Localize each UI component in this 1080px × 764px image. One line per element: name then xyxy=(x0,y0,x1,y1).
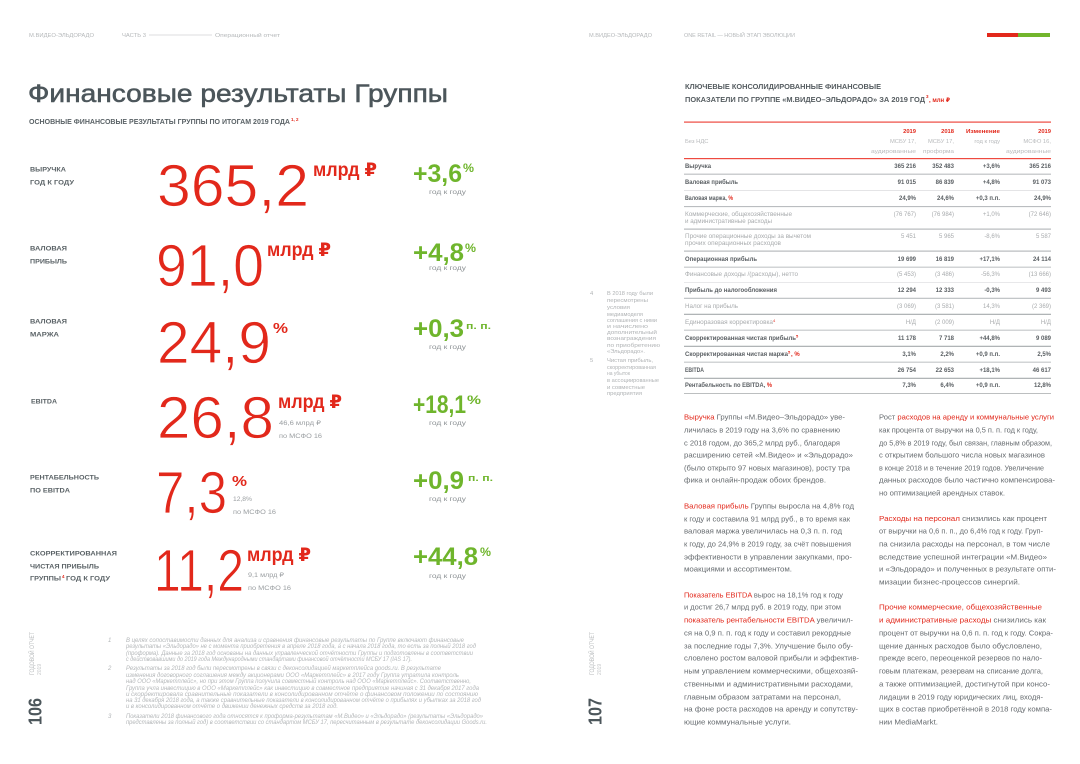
paragraph: SG&A: и административные расходы снизились как xyxy=(879,616,1047,624)
table header xyxy=(684,122,1052,159)
row: EBITDA margin xyxy=(685,382,1052,389)
side footnotes: 4 xyxy=(590,291,594,297)
row: income tax: (2 369) xyxy=(1032,304,1051,310)
row: operating profit: 16 819 xyxy=(936,257,955,263)
metric: gross profit: ПРИБЫЛЬ xyxy=(30,258,67,266)
side footnotes: медиамоделя xyxy=(607,312,643,318)
side footnotes: скорректированная xyxy=(607,365,656,371)
paragraph: personnel costs: и «Эльдорадо» и полученных в результате опти- xyxy=(879,564,1057,574)
left footnotes xyxy=(107,638,487,726)
left footnotes: результаты «Эльдорадо» не с момента приобретения в апреле 2018 года, а с начала 2018 года, то есть за полный 2018 год xyxy=(125,643,477,650)
left side page label: 2019 xyxy=(37,664,43,675)
left footnotes: (проформа). Данные за 2018 год основаны на данных управленческой отчётности Группы и подготовлены в соответствии xyxy=(126,650,474,657)
paragraph: gross profit: к году, до 24,9% в 2019 году, за счёт повышения xyxy=(684,540,851,548)
row: one-off adjustment: Н/Д xyxy=(906,320,916,326)
subtitle: ОСНОВНЫЕ ФИНАНСОВЫЕ РЕЗУЛЬТАТЫ ГРУППЫ ПО ИТОГАМ 2019 ГОДА xyxy=(29,119,290,126)
row: financial income: (13 666) xyxy=(1029,272,1051,278)
page number 106: 106 xyxy=(26,698,46,725)
table title: КЛЮЧЕВЫЕ КОНСОЛИДИРОВАННЫЕ ФИНАНСОВЫЕ xyxy=(685,82,881,91)
row: adjusted net margin: Скорректированная чистая маржа xyxy=(685,352,789,358)
metric: adjusted net profit: ГОД К ГОДУ xyxy=(66,576,111,582)
row: adjusted net profit: 9 089 xyxy=(1036,336,1052,342)
paragraph: personnel costs: от выручки на 0,6 п. п., до 6,4% год к году. Груп- xyxy=(879,526,1044,536)
metric: EBITDA margin: п. п. xyxy=(468,473,493,484)
row: gross profit: 86 839 xyxy=(936,180,955,186)
left footnotes: 1 xyxy=(108,638,111,644)
metric: EBITDA margin: 12,8% xyxy=(233,496,252,503)
side footnotes: дополнительный xyxy=(607,329,657,336)
row: adjusted net profit: Скорректированная чистая прибыль xyxy=(685,335,796,342)
paragraph: gross profit: Валовая прибыль Группы выросла на 4,8% год xyxy=(684,502,855,510)
row: other operating income: Прочие операционные доходы за вычетом xyxy=(685,234,811,240)
metric: EBITDA: год к году xyxy=(429,420,467,427)
metric: EBITDA margin: год к году xyxy=(429,496,467,503)
row: one-off adjustment: 4 xyxy=(773,318,776,323)
paragraph: EBITDA: на фоне роста расходов на аренду и сопутству- xyxy=(684,704,859,714)
paragraph: rent and utilities: в конце 2018 и в течение 2019 годов. Увеличение xyxy=(879,464,1044,472)
paragraph: SG&A: нии MediaMarkt. xyxy=(879,718,938,726)
paragraph: rent and utilities xyxy=(879,412,1056,498)
metric: adjusted net profit: СКОРРЕКТИРОВАННАЯ xyxy=(30,550,117,558)
metric: EBITDA margin: 7,3 xyxy=(156,460,227,526)
row: EBITDA: +18,1% xyxy=(979,368,1001,374)
right side page label xyxy=(588,632,603,675)
row: SG&A: Коммерческие, общехозяйственные xyxy=(685,211,793,218)
metric: EBITDA margin xyxy=(30,460,493,526)
row: SG&A: и административные расходы xyxy=(685,219,772,225)
right side page label: 2019 xyxy=(597,664,603,675)
metric: EBITDA: млрд ₽ xyxy=(278,392,342,413)
row: SG&A: +1,0% xyxy=(983,212,1001,218)
right page header: М.ВИДЕО-ЭЛЬДОРАДО xyxy=(589,33,653,39)
metric: revenue: ВЫРУЧКА xyxy=(30,166,66,174)
paragraph: personnel costs: па снизила расходы на персонал, в том числе xyxy=(879,540,1050,548)
left commentary column xyxy=(684,412,860,726)
metric: gross margin: +0,3 xyxy=(413,315,464,343)
right side page label: ГОДОВОЙ ОТЧЕТ xyxy=(588,632,596,675)
row: adjusted net profit: 7 718 xyxy=(939,336,955,342)
side footnotes xyxy=(590,291,661,397)
metric: EBITDA margin: ПО EBITDA xyxy=(30,488,70,494)
row: other operating income: прочих операционных расходов xyxy=(685,241,781,247)
side footnotes: вознаграждения xyxy=(607,336,656,342)
row: gross margin: 24,6% xyxy=(937,196,955,202)
paragraph: EBITDA: и достиг 26,7 млрд руб. в 2019 году, при этом xyxy=(684,602,841,612)
metric: adjusted net profit xyxy=(30,538,491,604)
table title xyxy=(685,82,951,104)
row: other operating income: 5 965 xyxy=(939,234,955,240)
paragraph: rent and utilities: с открытием большого числа новых магазинов xyxy=(879,450,1045,460)
metric: gross margin: год к году xyxy=(429,344,467,351)
metric: adjusted net profit: +44,8 xyxy=(413,543,478,571)
row: income tax: 14,3% xyxy=(983,304,1001,310)
metric: adjusted net profit: год к году xyxy=(429,573,467,580)
paragraph: personnel costs xyxy=(879,514,1057,586)
side footnotes: на убыток xyxy=(607,371,630,377)
paragraph: rent and utilities: данных расходов было частично компенсирова- xyxy=(879,476,1056,484)
right page header xyxy=(589,31,795,39)
row: adjusted net margin: , % xyxy=(791,352,800,358)
row: income tax: Налог на прибыль xyxy=(685,304,738,310)
table header: МСФО 16, xyxy=(1023,139,1051,145)
metric: revenue xyxy=(30,153,474,219)
paragraph: EBITDA: главным образом затратами на персонал, xyxy=(684,692,841,702)
paragraph: SG&A: а также оптимизацией, достигнутой при консо- xyxy=(879,680,1051,688)
table header: Без НДС xyxy=(685,139,708,145)
paragraph: gross profit: эффективности в управлении закупками, про- xyxy=(684,552,853,562)
row: profit before tax: Прибыль до налогообложения xyxy=(685,287,777,294)
left footnotes: Показатели 2018 финансового года относятся к проформа-результатам «М.Видео» и «Эльдорадо» (результаты «Эльдорадо» xyxy=(126,714,484,720)
paragraph: EBITDA: ся на 0,9 п. п. год к году и составил рекордные xyxy=(684,628,851,638)
paragraph: gross profit: к году и составила 91 млрд руб., в то время как xyxy=(684,514,851,524)
metric: adjusted net profit: по МСФО 16 xyxy=(248,585,291,592)
row: adjusted net margin: 2,5% xyxy=(1037,352,1052,358)
row: one-off adjustment: Н/Д xyxy=(1041,320,1051,326)
metric: EBITDA margin: РЕНТАБЕЛЬНОСТЬ xyxy=(30,474,99,482)
left footnotes: и в консолидированном отчёте о движении денежных средств за 2018 год. xyxy=(126,704,338,710)
paragraph: gross profit: валовая маржа увеличилась на 0,3 п. п. год xyxy=(684,526,843,536)
side footnotes: 5 xyxy=(590,358,593,364)
row: revenue: 352 483 xyxy=(932,164,955,170)
row: income tax: (3 069) xyxy=(897,304,916,310)
table header: 2019 xyxy=(903,129,917,135)
row: income tax xyxy=(685,304,1051,310)
row: SG&A xyxy=(685,211,1051,225)
right commentary column xyxy=(879,412,1057,726)
paragraph: EBITDA xyxy=(684,590,860,726)
metric: gross profit: млрд ₽ xyxy=(267,240,331,261)
row: operating profit: 19 699 xyxy=(898,257,917,263)
paragraph: EBITDA: показатель рентабельности EBITDA увеличил- xyxy=(684,616,854,624)
left footnotes: В целях сопоставимости данных для анализа и сравнения финансовые результаты по Группе включают финансовые xyxy=(126,638,465,644)
row: gross profit: +4,8% xyxy=(983,180,1001,186)
side footnotes: условия xyxy=(607,305,630,311)
paragraph: SG&A: щих в состав приобретённой в 2018 году компа- xyxy=(879,704,1053,714)
row: financial income xyxy=(685,272,1051,278)
metric: adjusted net profit: 4 xyxy=(62,574,65,579)
paragraph: revenue: Выручка Группы «М.Видео–Эльдорадо» уве- xyxy=(684,412,846,422)
paragraph: EBITDA: словлено ростом валовой прибыли и эффектив- xyxy=(684,654,860,662)
metric: revenue: 365,2 xyxy=(157,153,309,219)
side footnotes: и совместные xyxy=(607,385,645,391)
row: revenue xyxy=(685,164,1052,170)
row: profit before tax: -0,3% xyxy=(984,288,1001,294)
metric: EBITDA: % xyxy=(467,393,481,407)
metric: gross profit: 91,0 xyxy=(156,233,264,299)
metric: gross profit: год к году xyxy=(429,265,467,272)
paragraph: revenue: с 2018 годом, до 365,2 млрд руб., благодаря xyxy=(684,438,840,448)
row: SG&A: (76 767) xyxy=(894,212,916,218)
paragraph: SG&A: процент от выручки на 0,6 п. п. год к году. Сокра- xyxy=(879,628,1054,638)
row: profit before tax xyxy=(685,287,1052,294)
row: EBITDA: 46 617 xyxy=(1033,368,1052,374)
paragraph: SG&A: Прочие коммерческие, общехозяйственные xyxy=(879,602,1042,612)
row: gross margin: Валовая маржа, % xyxy=(685,196,734,202)
row: gross profit: 91 015 xyxy=(898,180,917,186)
paragraph: EBITDA: за последние годы 7,3%. Улучшение было обу- xyxy=(684,642,854,650)
financial table xyxy=(684,122,1052,394)
row: financial income: Финансовые доходы /(расходы), нетто xyxy=(685,272,799,278)
row: operating profit: 24 114 xyxy=(1033,257,1052,263)
page number 107: 107 xyxy=(586,698,606,725)
metric: gross profit: +4,8 xyxy=(413,239,464,267)
row: gross profit: 91 073 xyxy=(1033,180,1052,186)
row: gross profit xyxy=(685,179,1052,186)
row: EBITDA margin: +0,9 п.п. xyxy=(976,383,1000,389)
row: EBITDA: 26 754 xyxy=(898,368,917,374)
paragraph: rent and utilities: но оптимизацией арендных ставок. xyxy=(879,488,1005,498)
row: financial income: (3 486) xyxy=(935,272,954,278)
table header: год к году xyxy=(974,139,1000,145)
table header: МСБУ 17, xyxy=(890,139,916,145)
table header: 2019 xyxy=(1038,129,1052,135)
paragraph: EBITDA: Показатель EBITDA вырос на 18,1% год к году xyxy=(684,590,843,600)
row: adjusted net profit xyxy=(685,334,1052,342)
left footnotes: изменения договорного соглашения между акционерами ООО «Маркетплейс» в 2017 году Группа утратила контроль xyxy=(126,672,459,679)
row: adjusted net margin: +0,9 п.п. xyxy=(976,352,1000,358)
metric: gross profit: % xyxy=(465,241,476,255)
paragraph: SG&A: лидации в 2019 году юридических лиц, входя- xyxy=(879,692,1044,702)
left footnotes: с действовавшими до 2019 года Международными стандартами финансовой отчётности МСБУ 17 (IAS 17). xyxy=(126,656,412,663)
metric: EBITDA: по МСФО 16 xyxy=(279,433,322,440)
metric: gross margin: % xyxy=(273,320,288,337)
title: Финансовые результаты Группы xyxy=(28,80,448,108)
row: revenue: +3,6% xyxy=(983,164,1001,170)
row: one-off adjustment: (2 009) xyxy=(935,320,954,326)
row: adjusted net profit: 5 xyxy=(796,334,799,338)
metric: gross margin: ВАЛОВАЯ xyxy=(30,318,67,326)
row: adjusted net margin: 5 xyxy=(788,350,791,354)
left page header xyxy=(29,32,281,39)
side footnotes: соглашения с ними xyxy=(607,318,657,324)
metric: gross profit: ВАЛОВАЯ xyxy=(30,246,67,252)
metric: EBITDA margin: % xyxy=(232,473,247,490)
metric: gross margin: 24,9 xyxy=(157,310,271,376)
row: SG&A: (76 984) xyxy=(932,212,954,218)
row: SG&A: (72 646) xyxy=(1029,212,1051,218)
table header: аудированные xyxy=(1006,149,1051,155)
row: profit before tax: 9 493 xyxy=(1036,288,1052,294)
metric: revenue: +3,6 xyxy=(413,160,462,188)
paragraph: EBITDA: ющие коммунальные услуги. xyxy=(684,718,791,726)
table header: проформа xyxy=(923,149,955,155)
metric: EBITDA: +18,1 xyxy=(413,391,466,419)
paragraph: SG&A: щение данных расходов было обусловлено, xyxy=(879,642,1042,650)
left page header: Операционный отчет xyxy=(215,32,281,39)
row: EBITDA: EBITDA xyxy=(685,368,705,374)
metric: revenue: млрд ₽ xyxy=(313,160,377,181)
paragraph: personnel costs: мизации бизнес-процессов синергий. xyxy=(879,578,1020,586)
metric: adjusted net profit: млрд ₽ xyxy=(247,545,311,566)
metric: gross margin xyxy=(30,310,491,376)
left footnotes: Результаты за 2018 год были пересмотрены в связи с деконсолидацией маркетплейса goods.ru. В результате xyxy=(126,665,442,672)
paragraph: EBITDA: ственными и административными расходами, xyxy=(684,680,853,688)
row: one-off adjustment xyxy=(685,318,1051,326)
metric: adjusted net profit: ЧИСТАЯ ПРИБЫЛЬ xyxy=(30,564,99,570)
table rules xyxy=(684,174,1051,394)
row: income tax: (3 581) xyxy=(935,304,954,310)
paragraph: revenue: расширению сетей «М.Видео» и «Эльдорадо» xyxy=(684,450,853,460)
metric: gross profit xyxy=(30,233,476,299)
metric: adjusted net profit: 9,1 млрд ₽ xyxy=(248,572,284,579)
left footnotes: представлены за полный год) в соответствии со стандартом МСБУ 17, пересчитанным в результате деконсолидации Goods.ru. xyxy=(126,719,487,726)
row: adjusted net margin: 3,1% xyxy=(902,352,917,358)
row: adjusted net margin xyxy=(685,350,1052,358)
metric: gross margin: МАРЖА xyxy=(30,332,59,338)
row: other operating income xyxy=(685,234,1052,247)
row: revenue: 365 216 xyxy=(894,164,917,170)
row: financial income: -56,3% xyxy=(981,272,1001,278)
row: gross margin: +0,3 п.п. xyxy=(976,196,1000,202)
paragraph: SG&A: прежде всего, переоценкой резервов по нало- xyxy=(879,654,1043,662)
row: operating profit xyxy=(685,256,1052,263)
row: other operating income: 5 587 xyxy=(1036,234,1052,240)
row: EBITDA: 22 653 xyxy=(936,368,955,374)
row: financial income: (5 453) xyxy=(897,272,916,278)
row: EBITDA xyxy=(685,368,1052,374)
row: EBITDA margin: 7,3% xyxy=(902,383,917,389)
row: EBITDA margin: 12,8% xyxy=(1034,383,1052,389)
side footnotes: пересмотрены xyxy=(607,298,648,304)
metric: revenue: год к году xyxy=(429,189,467,196)
table header: аудированные xyxy=(871,149,916,155)
paragraph: gross profit: моакциями и ассортиментом. xyxy=(684,564,792,574)
row: operating profit: +17,1% xyxy=(979,257,1001,263)
row: gross margin xyxy=(685,196,1052,202)
paragraph: rent and utilities: до 5,8% в 2019 году, был связан, главным образом, xyxy=(879,438,1052,448)
row: gross margin: 24,9% xyxy=(899,196,917,202)
table header: МСБУ 17, xyxy=(928,139,954,145)
row: one-off adjustment: Единоразовая корректировка xyxy=(685,320,774,326)
row: adjusted net profit: 11 178 xyxy=(898,336,917,342)
row: operating profit: Операционная прибыль xyxy=(685,256,757,263)
paragraph: personnel costs: Расходы на персонал снизились как процент xyxy=(879,514,1048,523)
row: gross margin: 24,9% xyxy=(1034,196,1052,202)
metric: adjusted net profit: ГРУППЫ xyxy=(30,576,62,582)
row: adjusted net margin: 2,2% xyxy=(940,352,955,358)
left page header: М.ВИДЕО-ЭЛЬДОРАДО xyxy=(29,33,95,39)
row: one-off adjustment: Н/Д xyxy=(990,320,1000,326)
table header: 2018 xyxy=(941,129,955,135)
paragraph: revenue: личилась в 2019 году на 3,6% по сравнению xyxy=(684,426,840,434)
metric: EBITDA: EBITDA xyxy=(31,398,57,406)
paragraph: SG&A: говым платежам, резервам на списание долга, xyxy=(879,666,1043,676)
table title: , млн ₽ xyxy=(929,97,951,104)
row: profit before tax: 12 333 xyxy=(936,288,955,294)
metric: EBITDA margin: +0,9 xyxy=(413,467,464,495)
row: EBITDA margin: Рентабельность по EBITDA, % xyxy=(685,382,773,389)
paragraph: rent and utilities: Рост расходов на аренду и коммунальные услуги xyxy=(879,412,1054,422)
side footnotes: «Эльдорадо». xyxy=(607,349,645,355)
left footnotes: 2 xyxy=(107,666,112,672)
metric: EBITDA: 46,6 млрд ₽ xyxy=(279,420,321,427)
side footnotes: предприятия xyxy=(607,391,642,397)
metric: adjusted net profit: 11,2 xyxy=(154,538,244,604)
side footnotes: и начислено xyxy=(607,324,648,330)
left footnotes: Группа учла инвестицию в ООО «Маркетплейс» как инвестицию в совместное предприятие начиная с 31 декабря 2017 года xyxy=(126,685,480,692)
paragraph: rent and utilities: как процента от выручки на 0,5 п. п. год к году, xyxy=(879,426,1038,434)
paragraph: SG&A xyxy=(879,602,1054,726)
row: profit before tax: 12 294 xyxy=(898,288,917,294)
paragraph: revenue: (было открыто 97 новых магазинов), росту тра xyxy=(684,464,851,472)
metric: revenue: % xyxy=(463,161,474,175)
row: adjusted net profit: +44,8% xyxy=(979,336,1001,342)
row: EBITDA margin: 6,4% xyxy=(940,383,955,389)
right page header: ONE RETAIL — НОВЫЙ ЭТАП ЭВОЛЮЦИИ xyxy=(684,31,795,39)
table title: 3 xyxy=(926,94,929,99)
side footnotes: Чистая прибыль, xyxy=(607,358,653,364)
metric: EBITDA xyxy=(31,385,481,451)
row: other operating income: 5 451 xyxy=(901,234,917,240)
metric: EBITDA: 26,8 xyxy=(157,385,274,451)
paragraph: revenue xyxy=(684,412,853,484)
metric: adjusted net profit: % xyxy=(480,545,491,559)
paragraph: EBITDA: ным управлением коммерческими, общехозяй- xyxy=(684,666,859,676)
paragraph: personnel costs: вследствие успешной интеграции «М.Видео» xyxy=(879,552,1047,562)
side footnotes: В 2018 году были xyxy=(607,291,653,297)
table header: Изменение xyxy=(966,129,1001,135)
left page header: ЧАСТЬ 3 xyxy=(122,33,146,39)
side footnotes: по приобретению xyxy=(607,343,661,349)
table title: ПОКАЗАТЕЛИ ПО ГРУППЕ «М.ВИДЕО–ЭЛЬДОРАДО» ЗА 2019 ГОД xyxy=(685,95,926,104)
row: revenue: Выручка xyxy=(685,164,712,170)
metric: gross margin: п. п. xyxy=(466,321,491,332)
left side page label: ГОДОВОЙ ОТЧЕТ xyxy=(28,632,36,675)
header colour bar xyxy=(987,33,1050,37)
left footnotes: и скорректировала сравнительные показатели в консолидированном отчёте о финансовом положении по состоянию xyxy=(126,692,479,698)
left footnotes: на 31 декабря 2018 года, а также сравнительные показатели в консолидированном отчёте о прибылях и убытках за 2018 год xyxy=(126,698,482,704)
row: other operating income: -8,6% xyxy=(984,234,1001,240)
left side page label xyxy=(28,632,43,675)
side footnotes: в ассоциированные xyxy=(607,378,659,384)
row: revenue: 365 216 xyxy=(1029,164,1052,170)
left footnotes: над ООО «Маркетплейс», но при этом Группа получила совместный контроль над ООО «Маркетплейс». Соответственно, xyxy=(126,678,471,685)
row: gross profit: Валовая прибыль xyxy=(685,179,738,186)
subtitle: 1, 2 xyxy=(291,117,299,122)
metric: revenue: ГОД К ГОДУ xyxy=(30,180,75,186)
metric: EBITDA margin: по МСФО 16 xyxy=(233,509,276,516)
left footnotes: 3 xyxy=(108,714,112,720)
paragraph: revenue: фика и онлайн-продаж обоих брендов. xyxy=(684,476,826,484)
paragraph: gross profit xyxy=(684,502,855,574)
